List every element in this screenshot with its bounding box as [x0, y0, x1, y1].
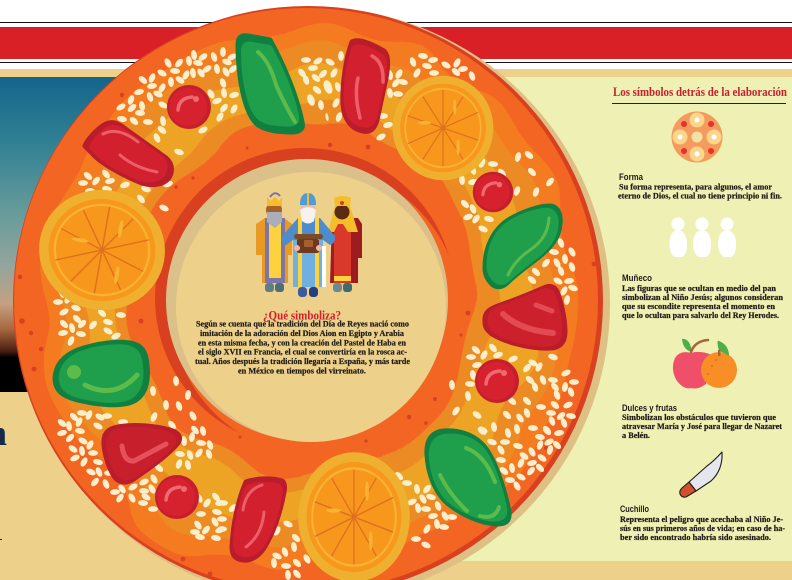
text block: Qué simboliza: en esta misma fecha, y con la creación del Pastel de Haba en — [198, 338, 406, 348]
text: Forma: Forma — [619, 172, 644, 183]
left beige panel — [0, 392, 300, 580]
candied fruit: red lower left — [104, 426, 179, 482]
candied fruit: green top — [238, 36, 302, 132]
icon: three kings — [256, 193, 362, 297]
candied orange slice: top right — [393, 76, 493, 180]
crust spots — [18, 93, 596, 576]
sesame seeds — [53, 47, 579, 580]
heading: Qué simboliza: ¿Qué simboliza? — [263, 308, 341, 322]
cherry: right upper — [473, 172, 513, 212]
text: Cuchillo — [620, 504, 785, 542]
text: Forma: Su forma representa, para algunos, el amor — [619, 182, 772, 192]
king left — [256, 193, 292, 292]
text: Dulces y frutas: atravesar María y José para llegar de Nazaret — [622, 421, 782, 431]
cherry: right lower — [475, 359, 519, 403]
icon: cuchillo — [680, 452, 722, 497]
text: Dulces y frutas: Dulces y frutas — [622, 403, 677, 414]
candied fruit: red top — [343, 41, 388, 131]
text block: Qué simboliza: Según se cuenta que la tradición del Día de Reyes nació como — [196, 318, 409, 328]
text: Muñeco: Las figuras que se ocultan en medio del pan — [622, 283, 776, 293]
small dash — [0, 539, 2, 540]
icon: rosca — [672, 112, 722, 162]
text: Forma — [618, 172, 782, 200]
candied orange slice: left — [30, 180, 174, 320]
text block: Qué simboliza: imitación de la adoración del Dios Aion en Egipto y Arabia — [200, 328, 405, 338]
text: Cuchillo: Representa el peligro que acechaba al Niño Je- — [620, 514, 783, 524]
lower black rule — [0, 62, 792, 63]
text: Cuchillo: sús en sus primeros años de vida; en caso de ha- — [620, 523, 785, 533]
icon: dulces y frutas — [673, 339, 737, 388]
inner circle — [155, 148, 460, 455]
heading rule — [612, 103, 786, 104]
illustration: rosca de reyes — [13, 6, 610, 580]
text: Forma: eterno de Dios, el cual no tiene principio ni fin. — [618, 190, 782, 200]
crust base — [13, 6, 610, 580]
candied fruit: red right — [485, 286, 565, 348]
king centre — [282, 193, 335, 297]
candied fruit: red bottom — [232, 479, 285, 560]
bottom beige panel — [0, 561, 792, 580]
beige strip — [0, 69, 792, 77]
text: Muñeco: que su escondite representa el momento en — [622, 301, 775, 311]
text block: Qué simboliza — [195, 318, 410, 376]
cherry: top left — [167, 85, 211, 129]
text: Muñeco — [622, 273, 783, 320]
text: Cuchillo: ber sido encontrado habría sido asesinado. — [620, 532, 771, 542]
text: Dulces y frutas: Simbolizan los obstáculos que tuvieron que — [622, 412, 776, 422]
panel: left sky photo — [0, 77, 200, 393]
cherry: bottom left — [155, 475, 199, 519]
candied fruit: red upper left — [85, 123, 172, 185]
text: Muñeco: Muñeco — [622, 273, 652, 284]
candied fruit: green left — [55, 342, 147, 405]
text: Dulces y frutas — [622, 403, 782, 440]
red header band — [0, 27, 792, 59]
text block: Qué simboliza: el siglo XVII en Francia, el cual se convertiría en la rosca ac- — [198, 346, 407, 356]
text: Muñeco: simbolizan al Niño Jesús; algunos consideran — [622, 292, 783, 302]
top black rule — [0, 22, 792, 23]
icon: muñecos — [669, 218, 736, 257]
text block: Qué simboliza: tual. Años después la tradición llegaría a España, y más tarde — [195, 356, 410, 366]
text: Cuchillo: Cuchillo — [620, 504, 649, 515]
text block: Qué simboliza: en México en tiempos del virreinato. — [238, 366, 366, 376]
text: Dulces y frutas: a Belén. — [622, 430, 650, 440]
king right — [328, 196, 362, 292]
candied orange slice: bottom — [298, 452, 410, 580]
candied fruit: green bottom — [427, 431, 509, 524]
text: Muñeco: que lo ocultan para salvarlo del Rey Herodes. — [622, 310, 779, 320]
candied fruit: green right — [485, 206, 560, 287]
panel: right background — [400, 77, 792, 561]
